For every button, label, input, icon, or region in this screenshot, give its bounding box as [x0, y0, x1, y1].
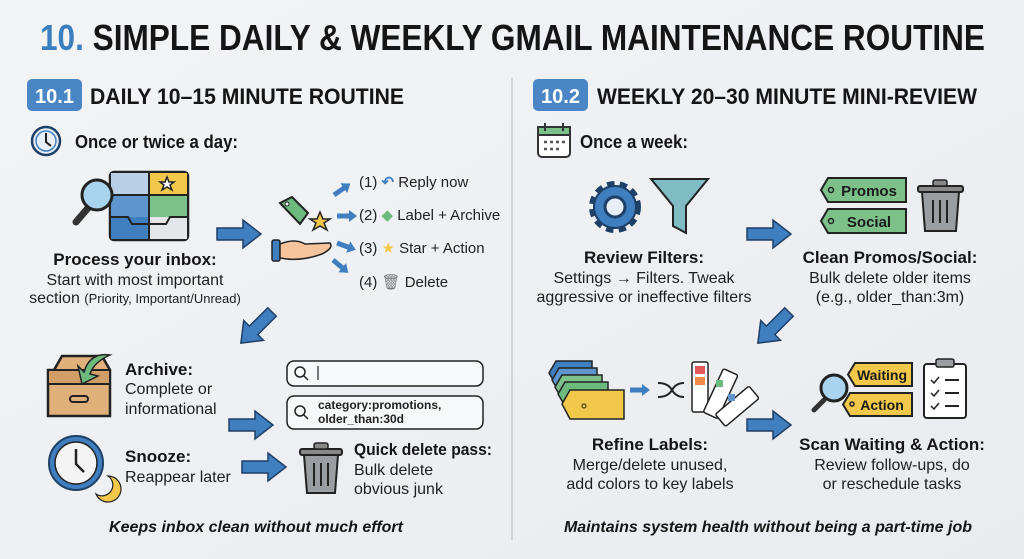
text: scan waiting: Scan Waiting & Action: — [799, 435, 985, 454]
subheading weekly: Once a week: — [580, 132, 688, 152]
icon: trash — [300, 443, 342, 493]
text: process inbox: Process your inbox: — [53, 250, 217, 269]
options list: (2) ◆ Label + Archive — [359, 207, 500, 224]
text: quick delete — [354, 440, 492, 498]
subheading daily: Once or twice a day: — [75, 132, 238, 152]
options list: (1) ↶ Reply now — [359, 174, 468, 191]
text: scan waiting: or reschedule tasks — [823, 476, 961, 493]
text: archive: Archive: — [125, 360, 193, 379]
heading daily: DAILY 10–15 MINUTE ROUTINE — [90, 84, 404, 109]
icon: hand with tag and star — [272, 197, 331, 261]
badge 10.1: 10.1 — [35, 86, 74, 108]
text: clean promos: Clean Promos/Social: — [803, 248, 977, 267]
text: refine labels: add colors to key labels — [566, 476, 734, 493]
text: review filters — [537, 248, 751, 306]
badge 10.2: 10.2 — [541, 86, 580, 108]
search boxes — [287, 361, 483, 429]
icon: promos social tags with trash: Social — [847, 214, 891, 231]
panel: weekly review — [533, 79, 985, 536]
icon: clock — [32, 127, 60, 155]
icon: archive box — [48, 355, 110, 416]
icon: calendar — [538, 123, 570, 157]
text: snooze: Snooze: — [125, 447, 191, 466]
text: process inbox — [29, 250, 241, 307]
arrow down-left — [748, 302, 799, 353]
icon: promos social tags with trash — [821, 178, 963, 233]
search boxes: category:promotions, — [318, 398, 441, 412]
text: quick delete: Quick delete pass: — [354, 440, 492, 459]
tagline weekly: Maintains system health without being a part-time job — [564, 519, 972, 536]
badge 10.2 — [533, 79, 588, 111]
text: archive: Complete or — [125, 381, 213, 398]
heading weekly: WEEKLY 20–30 MINUTE MINI-REVIEW — [597, 84, 977, 109]
text: refine labels: Refine Labels: — [592, 435, 708, 454]
tagline daily: Keeps inbox clean without much effort — [109, 519, 404, 536]
icon: label stack, shuffle, swatches — [549, 361, 759, 427]
text: clean promos: Bulk delete older items — [809, 270, 971, 287]
text: review filters: Settings → Filters. Tweak — [553, 270, 736, 287]
options list: (4) 🗑 Delete — [359, 274, 448, 291]
text: archive — [125, 360, 217, 418]
text: scan waiting: Review follow-ups, do — [814, 457, 970, 474]
arrow — [242, 453, 286, 481]
text: archive: informational — [125, 401, 217, 418]
text: process inbox: section (Priority, Important/Unread) — [29, 290, 241, 307]
search boxes: older_than:30d — [318, 412, 404, 426]
arrow — [217, 220, 261, 248]
arrow — [229, 411, 273, 439]
options list: (3) ★ Star + Action — [359, 240, 485, 257]
options list — [329, 174, 500, 291]
text: review filters: aggressive or ineffective filters — [537, 289, 751, 306]
text: process inbox: Start with most important — [47, 272, 224, 289]
panel: daily routine — [27, 79, 500, 536]
text: clean promos — [803, 248, 977, 306]
text: scan waiting — [799, 435, 985, 493]
arrow down-left — [231, 302, 282, 353]
icon: gear and funnel — [593, 179, 708, 233]
icon: waiting/action tags, magnifier, clipboard: Waiting — [857, 367, 907, 383]
text: clean promos: (e.g., older_than:3m) — [816, 289, 964, 306]
text: snooze — [125, 447, 232, 486]
arrow — [747, 220, 791, 248]
icon: inbox with magnifier — [76, 172, 188, 240]
text: quick delete: obvious junk — [354, 481, 444, 498]
badge 10.1 — [27, 79, 82, 111]
icon: promos social tags with trash: Promos — [841, 183, 897, 200]
text: refine labels: Merge/delete unused, — [573, 457, 727, 474]
text: quick delete: Bulk delete — [354, 462, 433, 479]
text: snooze: Reappear later — [125, 469, 232, 486]
icon: waiting/action tags, magnifier, clipboard — [814, 359, 966, 418]
arrow — [747, 411, 791, 439]
icon: waiting/action tags, magnifier, clipboard: Action — [860, 397, 904, 413]
text: refine labels — [566, 435, 734, 493]
icon: clock with moon — [49, 436, 121, 502]
text: review filters: Review Filters: — [584, 248, 704, 267]
